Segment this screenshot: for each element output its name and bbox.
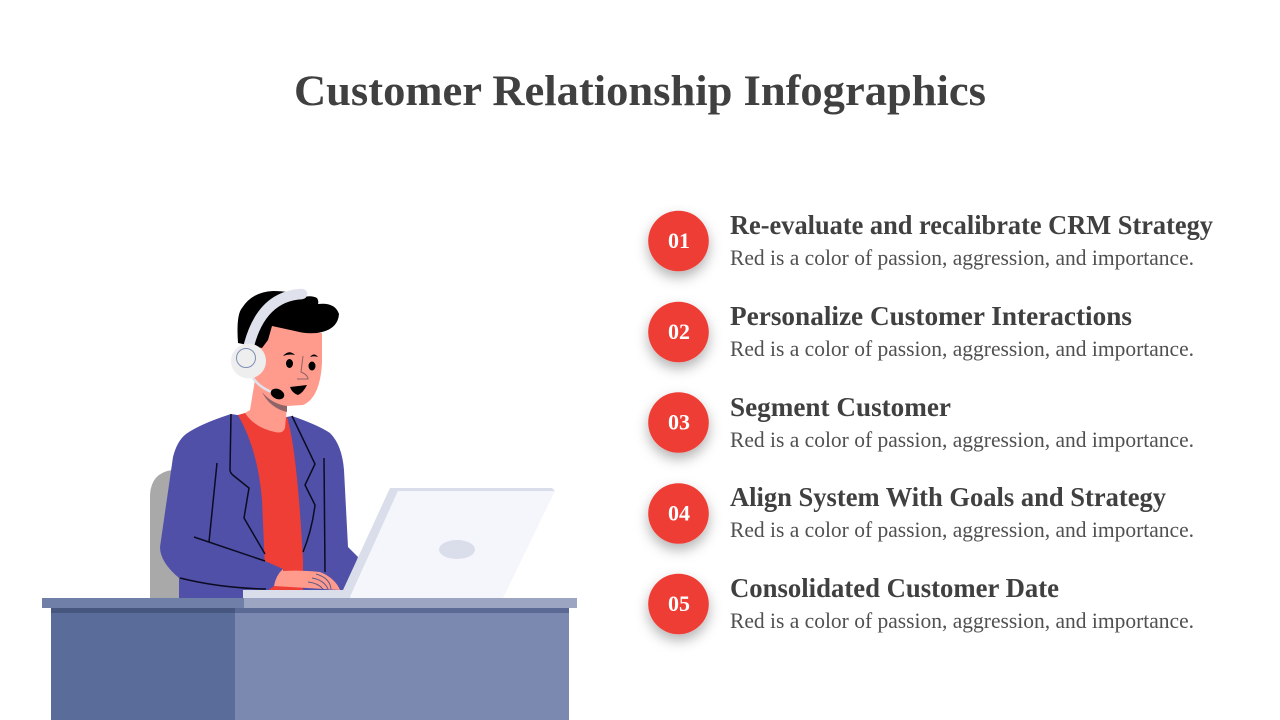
eyes and brows [283, 352, 318, 395]
jacket [160, 414, 358, 598]
description 03: Red is a color of passion, aggression, and importance. [730, 427, 1194, 452]
badge 04: 04 [668, 500, 690, 526]
hair [238, 291, 339, 348]
badge 02 [648, 302, 709, 362]
description 01: Red is a color of passion, aggression, and importance. [730, 245, 1194, 270]
heading 02: Personalize Customer Interactions [730, 301, 1132, 331]
badge 05: 05 [668, 591, 690, 616]
item 03 [648, 392, 1194, 453]
microphone [253, 378, 274, 393]
heading 04: Align System With Goals and Strategy [730, 482, 1166, 512]
badge 04 [648, 483, 709, 544]
badge 03 [648, 392, 709, 453]
description 04: Red is a color of passion, aggression, and importance. [730, 517, 1194, 542]
illustration: agent at desk [42, 291, 577, 720]
laptop base [243, 590, 352, 598]
desk top [42, 598, 244, 608]
description 02: Red is a color of passion, aggression, and importance. [730, 336, 1194, 361]
chair [150, 470, 185, 598]
desk body [51, 608, 235, 720]
neck shadow [262, 392, 287, 412]
neck and face [245, 326, 322, 432]
item 05 [648, 573, 1194, 634]
headset band [249, 294, 302, 345]
description 05: Red is a color of passion, aggression, and importance. [730, 608, 1194, 633]
item 02 [648, 301, 1194, 362]
badge 03: 03 [668, 410, 690, 434]
badge 05 [648, 574, 709, 634]
headset earcup [231, 344, 266, 378]
badge 01: 01 [668, 228, 690, 253]
hand [274, 569, 340, 590]
fingers [308, 574, 331, 589]
sleeve [245, 556, 283, 592]
badge 02: 02 [668, 319, 690, 344]
heading 03: Segment Customer [730, 392, 951, 422]
title: Customer Relationship Infographics [294, 68, 986, 115]
nose [297, 356, 308, 379]
laptop logo [439, 540, 475, 559]
badge 01 [648, 211, 709, 271]
item 01 [648, 210, 1213, 271]
laptop screen back [343, 488, 555, 597]
shirt [238, 413, 303, 592]
heading 01: Re-evaluate and recalibrate CRM Strategy [730, 210, 1213, 240]
laptop screen [350, 491, 555, 598]
heading 05: Consolidated Customer Date [730, 573, 1059, 603]
jacket lines [180, 414, 325, 589]
item 04 [648, 482, 1194, 544]
